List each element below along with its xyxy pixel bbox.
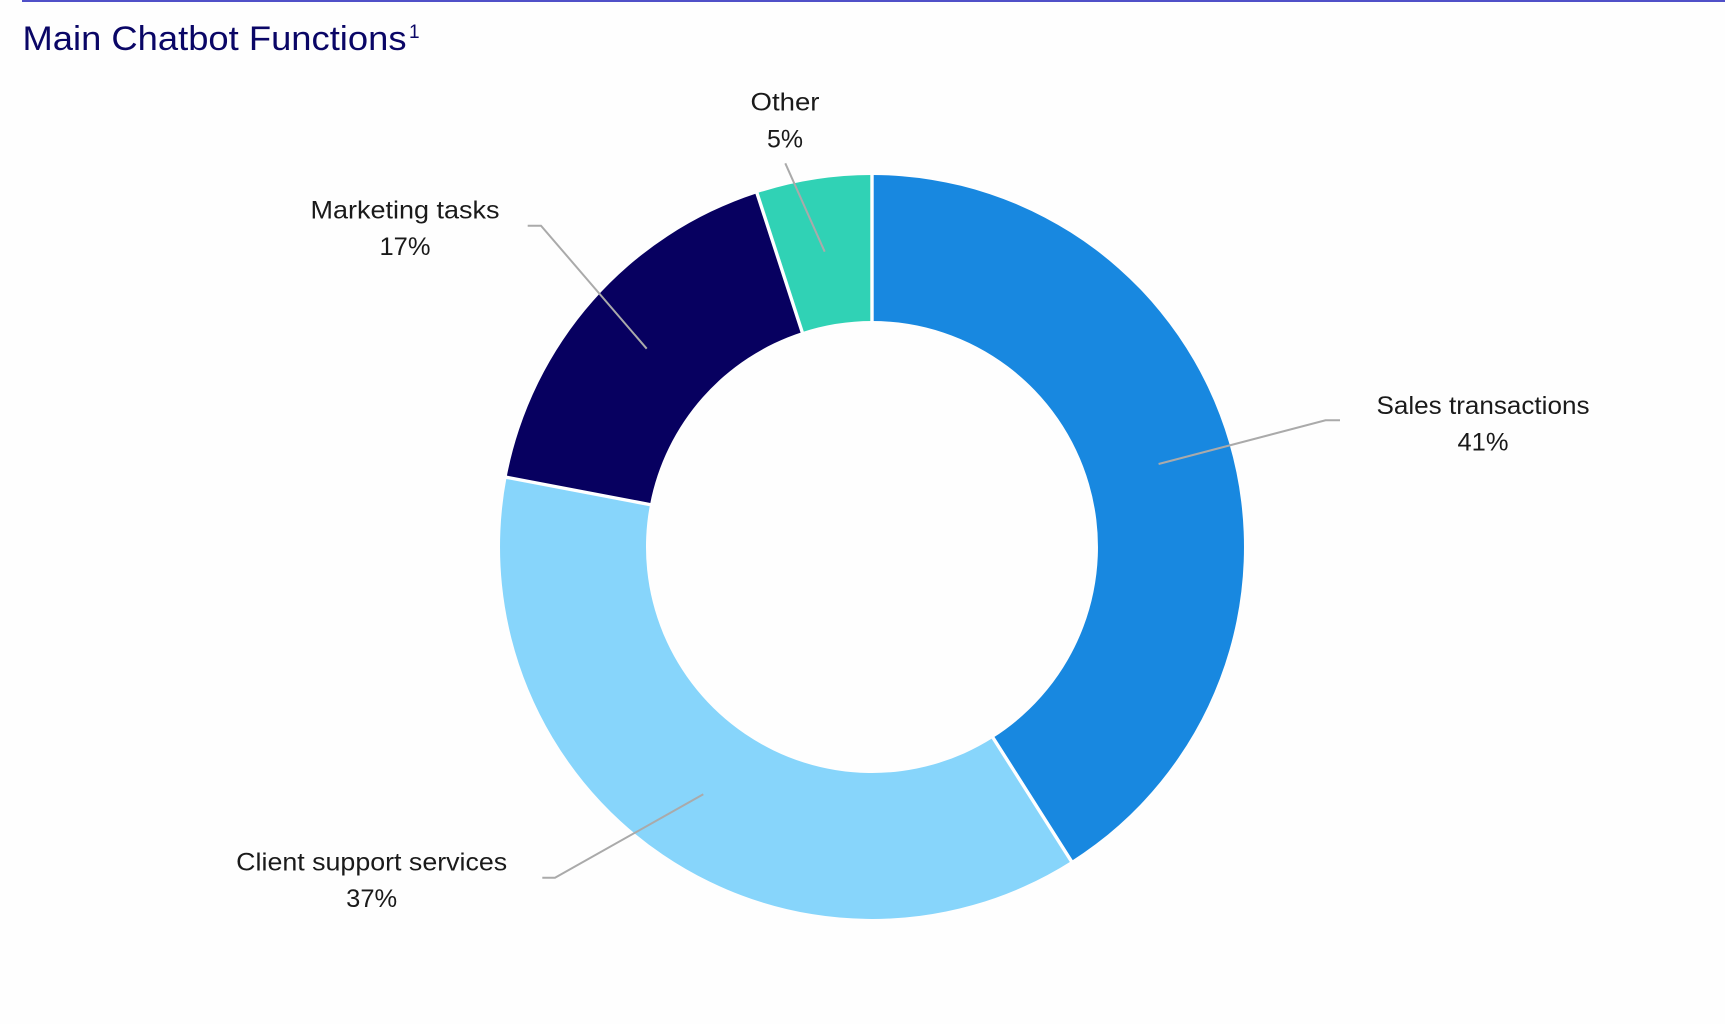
label: client support services	[236, 848, 507, 913]
label: sales transactions	[1376, 392, 1590, 456]
label: sales transactions: Sales transactions	[1376, 392, 1590, 420]
leader line: sales transactions	[1159, 420, 1340, 464]
label: sales transactions: 41%	[1458, 428, 1508, 456]
leader line: other	[785, 163, 825, 252]
leader line: marketing tasks	[528, 226, 647, 349]
label: marketing tasks: Marketing tasks	[310, 196, 500, 224]
label: marketing tasks: 17%	[380, 233, 430, 261]
slice: client support services 37%	[500, 477, 1071, 919]
label: marketing tasks	[310, 196, 500, 261]
leader line: client support services	[542, 794, 703, 878]
donut chart	[500, 173, 1244, 919]
label: client support services: 37%	[346, 885, 397, 913]
title: 1	[409, 22, 420, 43]
slice: sales transactions 41%	[872, 175, 1244, 861]
slice: marketing tasks 17%	[507, 193, 802, 505]
slice: other 5%	[757, 175, 872, 332]
label: client support services: Client support services	[236, 848, 507, 876]
title: Main Chatbot Functions	[22, 20, 406, 58]
label: other: Other	[750, 88, 820, 116]
label: other	[750, 88, 820, 154]
label: other: 5%	[767, 126, 803, 154]
